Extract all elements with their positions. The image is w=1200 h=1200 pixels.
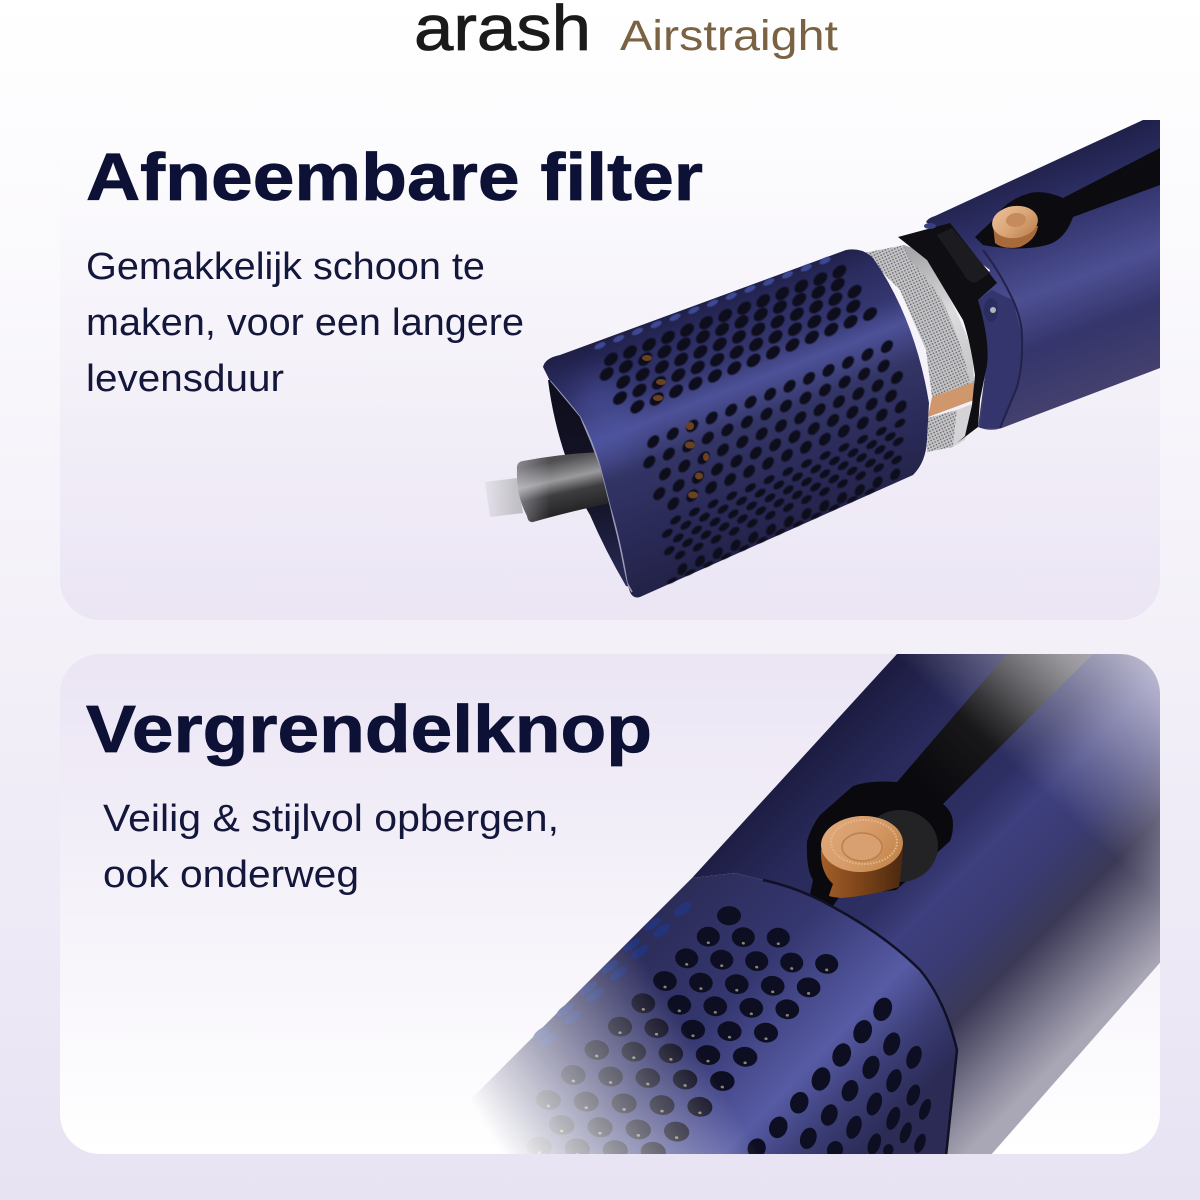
text block: filter description: Gemakkelijk schoon te: [86, 246, 485, 288]
top screw: [924, 223, 936, 229]
middle hole group: [649, 347, 901, 504]
filter housing: [470, 873, 957, 1156]
body: [692, 654, 1165, 1156]
top slots: [600, 261, 825, 346]
screw: [984, 298, 998, 322]
collar edge: [983, 250, 1022, 428]
collar highlight: [978, 290, 1022, 428]
upper hole group: [607, 272, 870, 407]
heading: Afneembare filter: Afneembare filter: [86, 140, 703, 215]
perforations: [600, 261, 901, 580]
illustration: lock button close-up: [470, 654, 1165, 1161]
text block: lock description: ook onderweg: [103, 854, 359, 896]
logo: arash Airstraight: Airstraight: [620, 12, 838, 60]
perforations: [531, 899, 933, 1161]
opening of the filter: [548, 380, 645, 590]
text block: filter description: levensduur: [86, 358, 284, 400]
body: [926, 120, 1160, 430]
text block: filter description: maken, voor een langere: [86, 302, 524, 344]
copper lock button: [820, 814, 904, 898]
seam: [763, 880, 957, 1156]
hose: [485, 452, 609, 522]
logo: arash Airstraight: [414, 0, 838, 64]
text block: filter description: [86, 246, 524, 400]
dense lower hole group: [667, 423, 900, 580]
panel: Vergrendelknop: [60, 654, 1165, 1161]
lower mesh: [927, 410, 957, 452]
slot: [807, 654, 1093, 906]
text block: lock description: Veilig & stijlvol opbergen,: [103, 798, 559, 840]
text block: lock description: [103, 798, 559, 896]
recess under button: [877, 810, 938, 882]
mesh band: [863, 245, 974, 397]
panel: Afneembare filter: [60, 120, 1160, 620]
highlights on housing: [550, 378, 639, 592]
copper strip: [928, 382, 974, 417]
warm glints inside holes: [642, 355, 709, 498]
slot and notch: [975, 148, 1160, 248]
filter housing: [543, 249, 929, 597]
heading: Vergrendelknop: Vergrendelknop: [86, 692, 652, 767]
silver strip: [903, 245, 974, 384]
black ring: [898, 223, 997, 443]
copper pin: [990, 203, 1040, 248]
overlay fading the product toward the top right: [906, 654, 1160, 880]
illustration: styler with removable filter: [485, 120, 1160, 597]
latch: [937, 228, 990, 283]
